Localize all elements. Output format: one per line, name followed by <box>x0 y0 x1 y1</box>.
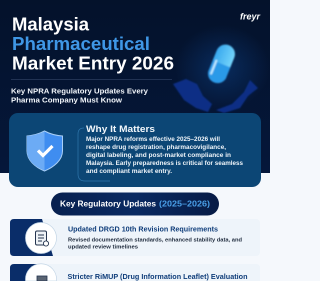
subtitle: Pharma Company Must Know <box>11 96 122 104</box>
body text: digital labeling, and post-market compliance in <box>86 152 231 159</box>
section heading pill: Key Regulatory Updates <box>60 200 156 208</box>
icon: document <box>26 222 56 254</box>
icon: shield <box>27 131 62 171</box>
title: Market Entry 2026 <box>12 52 174 74</box>
card: DRGD <box>10 219 260 256</box>
body text: Malaysia. Early preparedness is critical for seamless <box>86 160 243 167</box>
card heading: Stricter RiMUP (Drug Information Leaflet) Evaluation <box>68 274 248 281</box>
subtitle: Key NPRA Regulatory Updates Every <box>11 86 149 96</box>
panel: why it matters <box>9 113 261 187</box>
pill capsule <box>205 42 238 86</box>
section heading pill <box>51 192 219 216</box>
card text: updated review timelines <box>68 244 138 250</box>
title: Pharmaceutical <box>12 33 150 54</box>
card heading: Updated DRGD 10th Revision Requirements <box>68 226 218 234</box>
logo: freyr: freyr <box>240 12 261 22</box>
section heading pill: (2025–2026) <box>159 200 210 208</box>
subtitle <box>11 80 172 104</box>
frame line <box>78 128 110 181</box>
title: Malaysia <box>12 14 90 34</box>
heading: Why It Matters <box>86 124 155 135</box>
body text: Major NPRA reforms effective 2025–2026 will <box>86 136 220 143</box>
card: RiMUP <box>10 264 260 281</box>
card text: Revised documentation standards, enhanced stability data, and <box>68 238 242 244</box>
body text: and compliant market entry. <box>86 168 172 175</box>
body text <box>86 136 243 175</box>
icon: leaflet <box>26 264 57 281</box>
body text: reshape drug registration, pharmacovigilance, <box>86 144 226 151</box>
map silhouette <box>173 79 258 113</box>
card text <box>68 238 242 250</box>
header background <box>0 0 270 173</box>
title <box>12 14 174 74</box>
